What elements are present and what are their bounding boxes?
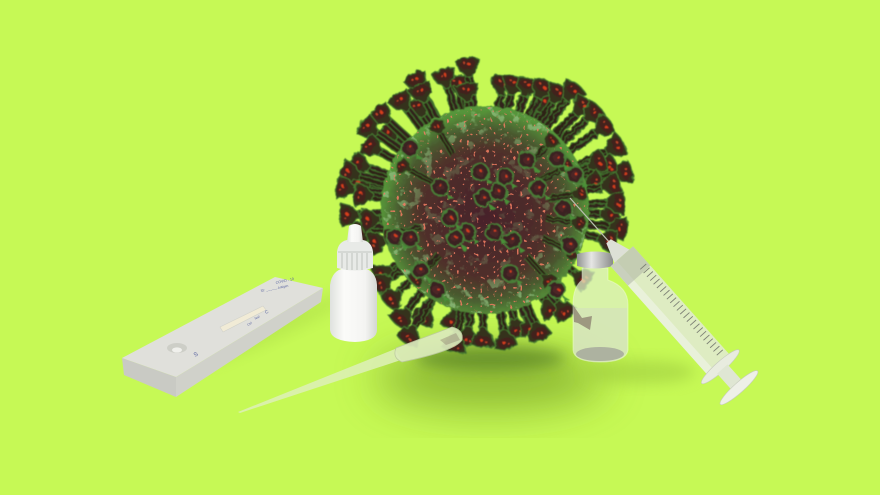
limb and surface spikes — [381, 117, 588, 303]
virus — [334, 56, 635, 355]
body texture — [380, 105, 590, 315]
pipette tube — [238, 349, 401, 413]
kit printed labels: ID: ______ — [260, 285, 278, 293]
barrel flange — [698, 346, 742, 387]
kit side faces — [122, 358, 176, 397]
needle — [570, 198, 611, 244]
kit printed labels: Test — [254, 314, 261, 321]
graduation ticks — [640, 264, 723, 355]
kit printed labels: COVID - 19 — [275, 277, 294, 285]
plunger disc — [717, 367, 761, 408]
bottle nozzle — [347, 224, 363, 242]
bottle cap — [337, 240, 373, 270]
refracted virus spike — [573, 305, 592, 330]
syringe — [551, 181, 761, 408]
pipette bulb — [395, 327, 462, 362]
limb spikes — [381, 117, 588, 291]
kit printed labels: C — [264, 309, 270, 315]
kit top face — [122, 277, 323, 377]
vial metal cap — [577, 252, 613, 268]
vial bottom — [576, 347, 624, 361]
ground shadow — [200, 285, 695, 408]
pipette — [238, 327, 462, 413]
dropper bottle — [330, 224, 377, 342]
sample well — [167, 343, 187, 353]
plunger rod — [717, 364, 744, 392]
result window — [220, 306, 266, 332]
red specks — [380, 105, 590, 315]
virus body sphere — [381, 106, 589, 314]
virus spikes, back ring — [348, 73, 621, 348]
virus spikes, outer ring — [334, 56, 635, 355]
vial liquid — [574, 308, 627, 362]
surface rings — [386, 140, 588, 303]
vial glass body — [573, 268, 628, 362]
green mottling — [380, 105, 590, 315]
kit printed labels: S — [193, 352, 199, 359]
hub — [601, 235, 629, 263]
kit printed labels: Ctrl — [246, 321, 253, 327]
barrel — [611, 246, 732, 377]
kit printed labels: Antigen — [277, 284, 289, 290]
scene: virus and medical items on lime background — [122, 56, 758, 432]
test kit — [122, 277, 323, 397]
bottle body — [330, 268, 377, 342]
kit printed labels — [193, 277, 294, 359]
vial — [573, 252, 628, 362]
